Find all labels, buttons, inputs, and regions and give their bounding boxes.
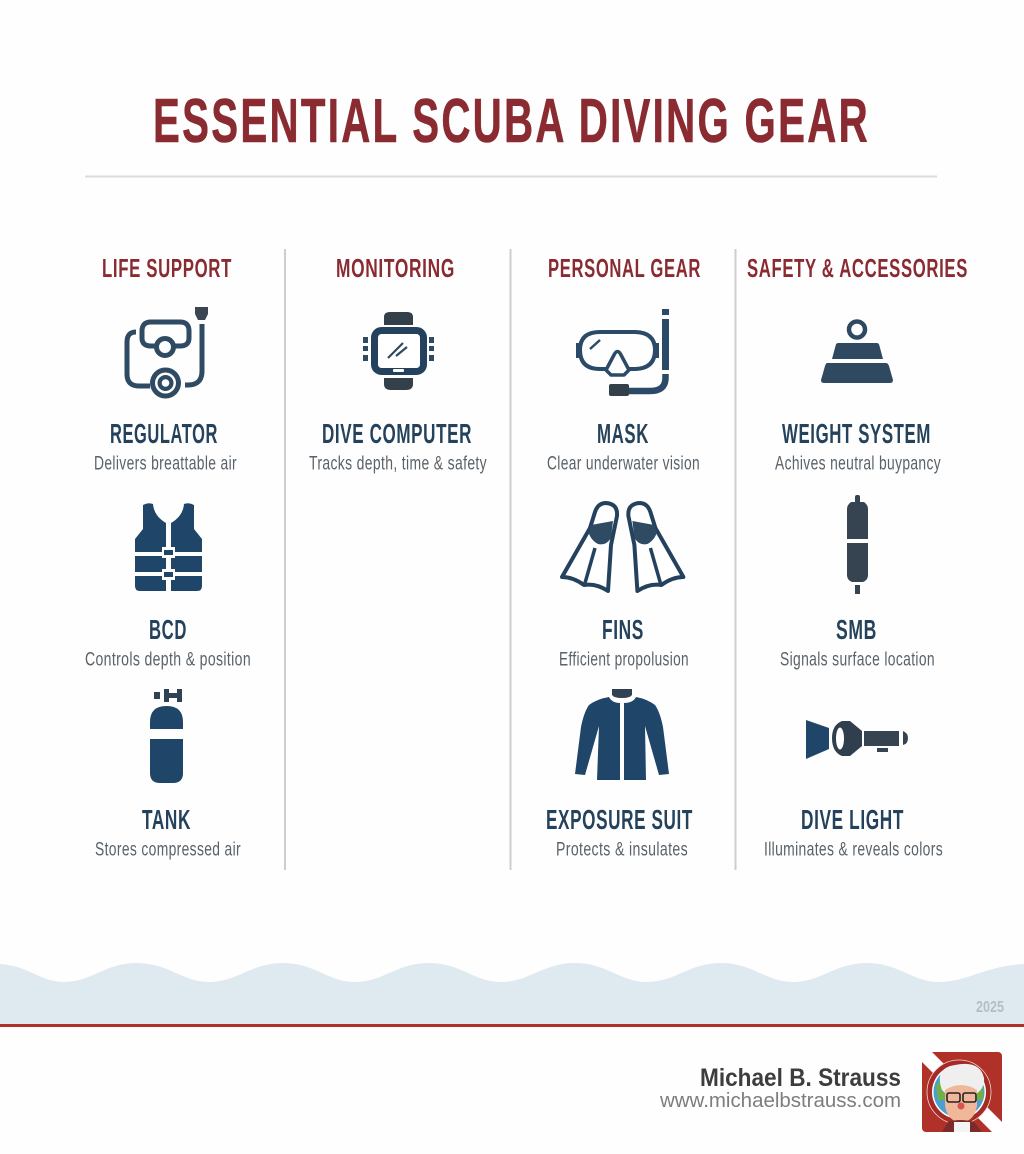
icon: tank	[150, 689, 183, 783]
item text: tank: Stores compressed air	[95, 838, 241, 860]
logo badge	[922, 1052, 1002, 1132]
item text: SMB: Signals surface location	[780, 648, 935, 670]
item title: BCD: BCD	[149, 614, 187, 645]
item title: SMB: SMB	[836, 614, 877, 645]
icon: dive light	[806, 720, 908, 759]
icon: weight system	[821, 322, 893, 383]
panel: safety and accessories	[747, 253, 968, 860]
item title: exposure suit: EXPOSURE SUIT	[546, 804, 693, 835]
item text: regulator: Delivers breattable air	[94, 452, 237, 474]
panel: personal gear	[546, 253, 701, 860]
panel: monitoring	[309, 253, 487, 474]
item text: fins: Efficient propolusion	[559, 648, 689, 670]
wave band	[0, 963, 1024, 1024]
footer website: www.michaelbstrauss.com	[659, 1090, 901, 1112]
item title: tank: TANK	[142, 804, 191, 835]
icon: SMB	[847, 495, 868, 594]
heading: personal gear: PERSONAL GEAR	[548, 253, 701, 283]
icon: fins	[562, 503, 683, 591]
item text: dive computer: Tracks depth, time & safety	[309, 452, 487, 474]
item title: dive computer: DIVE COMPUTER	[322, 418, 472, 449]
icon: dive computer	[363, 312, 434, 390]
item text: dive light: Illuminates & reveals colors	[764, 838, 943, 860]
panel: life support	[85, 253, 251, 860]
icon: BCD vest	[135, 503, 202, 591]
icon: exposure suit	[575, 689, 669, 780]
heading: life support: LIFE SUPPORT	[102, 253, 232, 283]
item text: BCD: Controls depth & position	[85, 648, 251, 670]
item title: fins: FINS	[602, 614, 644, 645]
icon: regulator	[127, 307, 208, 398]
icon: mask	[576, 309, 669, 396]
item title: weight system: WEIGHT SYSTEM	[782, 418, 931, 449]
item title: mask: MASK	[597, 418, 649, 449]
item text: exposure suit: Protects & insulates	[556, 838, 688, 860]
footer author name: Michael B. Strauss	[700, 1064, 901, 1092]
item text: mask: Clear underwater vision	[547, 452, 700, 474]
item text: weight system: Achives neutral buypancy	[775, 452, 941, 474]
right fin	[628, 503, 683, 591]
year label: 2025	[976, 999, 1004, 1016]
item title: regulator: REGULATOR	[110, 418, 218, 449]
heading: monitoring: MONITORING	[336, 253, 455, 283]
item title: dive light: DIVE LIGHT	[801, 804, 904, 835]
